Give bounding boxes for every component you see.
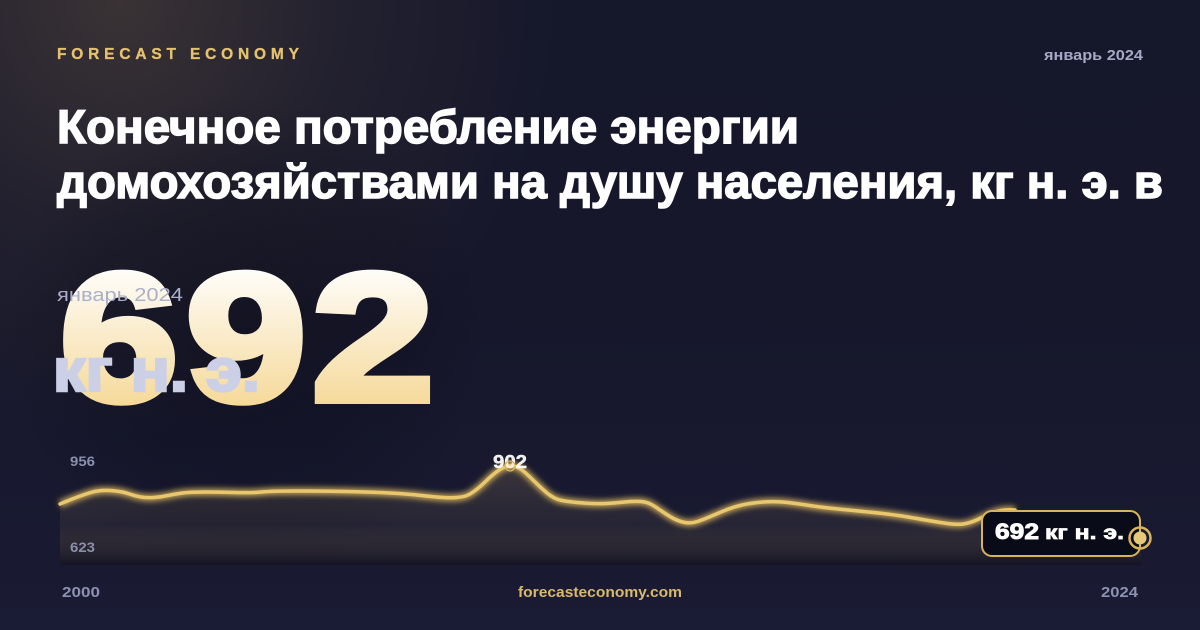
callout (982, 511, 1140, 556)
source url: forecasteconomy.com (518, 585, 682, 601)
unit label: кг н. э. (53, 337, 260, 404)
brand label: FORECAST ECONOMY (57, 46, 300, 63)
x axis end year: 2024 (1101, 585, 1138, 601)
line chart (60, 452, 1150, 565)
date under title: январь 2024 (57, 284, 183, 305)
big number 692: 2 (312, 237, 434, 439)
peak label: 902 (493, 452, 527, 472)
chart area fill (60, 466, 1141, 565)
axis max label: 956 (70, 454, 96, 469)
title (57, 100, 1163, 208)
axis min label: 623 (70, 540, 96, 555)
callout: 692 (995, 519, 1039, 544)
title: Конечное потребление энергии (57, 100, 799, 153)
line glow (60, 466, 1015, 524)
big number 692 (60, 237, 434, 439)
big number 692: 6 (60, 237, 178, 439)
data line (60, 466, 1015, 524)
date top right: январь 2024 (1044, 47, 1144, 64)
callout: кг н. э. (1045, 523, 1124, 544)
x axis start year: 2000 (62, 585, 100, 601)
peak marker (505, 461, 515, 471)
end point marker (1130, 528, 1150, 548)
big number 692: 9 (186, 237, 306, 439)
title: домохозяйствами на душу населения, кг н. э. в (57, 155, 1163, 208)
